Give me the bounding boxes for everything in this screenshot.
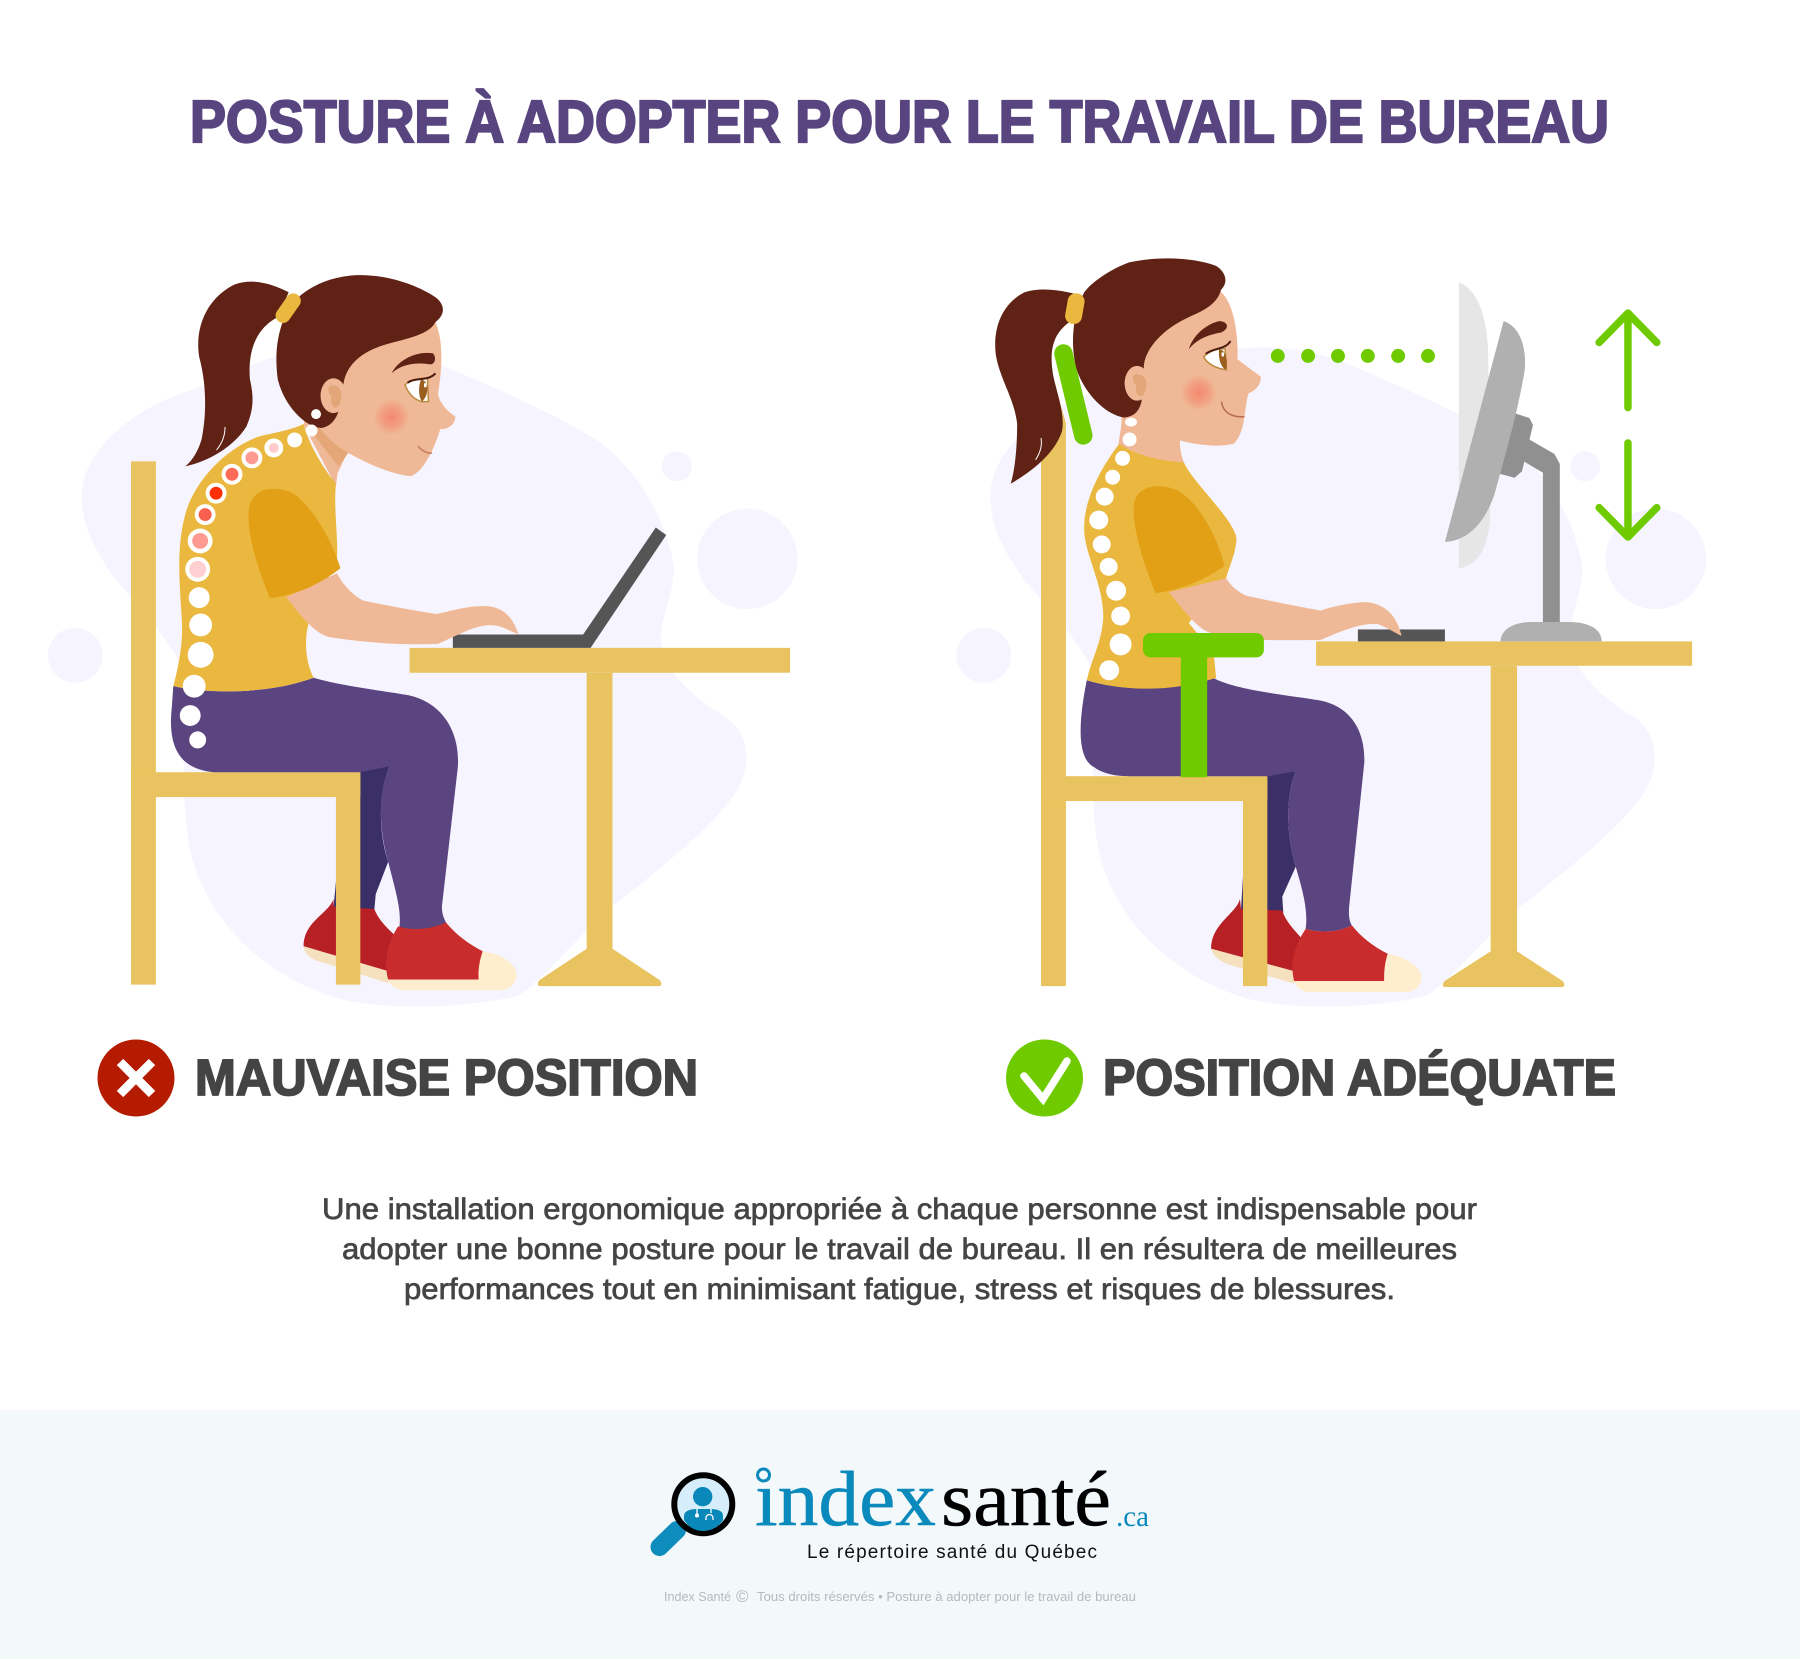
icon: magnifier [660, 1475, 732, 1547]
desk [1316, 641, 1692, 987]
woman: trousers [171, 678, 458, 931]
woman: arm [286, 573, 518, 644]
footer logo [660, 1455, 1149, 1563]
woman: hair band [1064, 292, 1086, 325]
keyboard [1358, 629, 1445, 641]
woman: ear [1125, 366, 1149, 401]
logo wordmark: .ca [1116, 1500, 1149, 1533]
heading: good position: POSITION ADÉQUATE [1103, 1049, 1616, 1106]
woman: ear [321, 378, 346, 413]
woman: arm [1169, 578, 1402, 640]
woman: front shoe [386, 922, 517, 990]
monitor [1445, 282, 1602, 641]
panel: bad posture illustration [48, 275, 798, 1007]
woman: ponytail [995, 289, 1074, 484]
heading: bad position: MAUVAISE POSITION [195, 1049, 698, 1106]
icon: red cross [98, 1040, 174, 1116]
woman: hair [276, 275, 443, 428]
woman: sleeve [1134, 486, 1225, 593]
woman: hair band [273, 290, 304, 326]
laptop [453, 527, 666, 648]
spine markers [180, 409, 321, 748]
woman: neck and head [304, 305, 455, 486]
text block: description [322, 1193, 1477, 1306]
back leg and shoe [304, 766, 396, 983]
logo tagline: Le répertoire santé du Québec [807, 1542, 1097, 1563]
desk [410, 648, 790, 986]
spine markers [1089, 418, 1137, 680]
woman: face details [1181, 321, 1244, 417]
logo wordmark [755, 1455, 1149, 1542]
neck support [1063, 353, 1083, 435]
text block: description: Une installation ergonomique appropriée à chaque personne est indispensable pour [322, 1193, 1477, 1226]
woman: shirt [1084, 444, 1237, 689]
chair [1041, 389, 1267, 986]
back leg and shoe [1211, 771, 1302, 984]
lumbar support [1143, 633, 1264, 777]
panel: good posture illustration [956, 258, 1706, 1007]
arrow: height adjustment [1599, 313, 1657, 537]
text block: description: adopter une bonne posture pour le travail de bureau. Il en résultera de meilleures [342, 1233, 1457, 1266]
copyright line: Tous droits réservés • Posture à adopter pour le travail de bureau [757, 1589, 1136, 1604]
woman: ponytail [185, 282, 289, 466]
woman: trousers [1081, 677, 1364, 932]
woman: front shoe [1292, 925, 1422, 992]
footer band [0, 1410, 1800, 1659]
background blob [956, 347, 1706, 1007]
icon: green check [1006, 1040, 1083, 1116]
chair [131, 461, 360, 985]
logo wordmark: index [755, 1455, 936, 1542]
background blob [48, 347, 798, 1007]
logo wordmark: santé [941, 1455, 1111, 1542]
copyright line: © [736, 1587, 749, 1606]
woman: hair [1073, 258, 1225, 418]
woman: shirt [173, 424, 337, 691]
copyright line: Index Santé [664, 1589, 731, 1604]
woman: neck and head [1118, 280, 1261, 471]
line of sight dots [1271, 349, 1435, 363]
woman: sleeve [248, 489, 340, 598]
text block: description: performances tout en minimisant fatigue, stress et risques de blessures. [404, 1273, 1395, 1306]
woman: face details [374, 353, 435, 453]
title: POSTURE À ADOPTER POUR LE TRAVAIL DE BUREAU [190, 89, 1609, 155]
copyright line [664, 1587, 1136, 1606]
